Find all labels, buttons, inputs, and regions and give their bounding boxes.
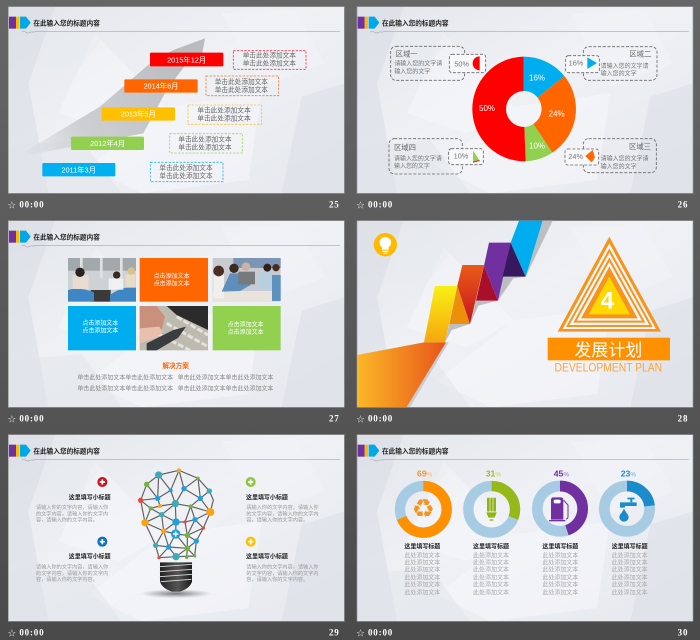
caption column 2: 此处添加文本: [473, 559, 509, 567]
footer: 00:00: [368, 627, 393, 637]
text block: bottom right: 这里填写小标题: [246, 553, 288, 561]
callout: region 4: 区域四: [394, 143, 416, 152]
ring chart: 69% recycle: 69%: [417, 468, 433, 478]
callout: region 2: [566, 47, 657, 80]
caption column 2: 此处添加文本: [473, 573, 509, 581]
caption column 4: 此处添加文本: [612, 551, 648, 559]
slide 25: timeline: [7, 7, 344, 211]
icon: faucet: [619, 498, 637, 522]
tile: blue: 点击添加文本: [82, 326, 118, 334]
footer: [7, 414, 340, 426]
network light bulb: [138, 468, 214, 598]
caption column 4: 此处添加文本: [612, 573, 648, 581]
slide header: 在此输入您的标题内容: [382, 18, 449, 27]
text block: bottom right: 容，请输入你的文字内容。: [246, 575, 308, 583]
donut: [472, 57, 576, 161]
nested triangle badge: [558, 237, 661, 332]
slide header: [9, 17, 340, 33]
caption column 3: 此处添加文本: [542, 573, 578, 581]
slide header: [9, 445, 340, 461]
folded ribbon: [357, 221, 553, 407]
footer: 00:00: [19, 627, 44, 637]
caption column 1: 此处添加文本: [404, 573, 440, 581]
caption column 4: 此处添加文本: [612, 559, 648, 567]
caption column 2: 此处添加文本: [473, 581, 509, 589]
footer: ☆: [7, 200, 16, 211]
section title banner: [548, 338, 670, 375]
timeline 2012: 单击此处添加文本: [178, 134, 232, 143]
slide 30: ring charts: [356, 435, 693, 639]
callout: region 2: 区域二: [629, 50, 651, 59]
timeline 2015: 单击此处添加文本: [243, 51, 296, 60]
solution text: 单击此处添加文本单击此处添加文本: [77, 385, 173, 393]
footer: 25: [329, 199, 340, 209]
callout: region 4: 10%: [454, 151, 469, 160]
caption column 3: 此处添加文本: [542, 559, 578, 567]
timeline 2011: [42, 162, 223, 182]
callout: region 4: [389, 139, 483, 174]
tile: blue: [68, 306, 136, 350]
ring chart: 23% water: [604, 468, 650, 531]
footer: 00:00: [368, 414, 393, 424]
caption column 4: 这里填写标题: [612, 542, 648, 550]
slide header: 在此输入您的标题内容: [382, 446, 449, 455]
caption column 1: 此处添加文本: [404, 581, 440, 589]
footer: [356, 627, 688, 639]
footer: 00:00: [19, 414, 44, 424]
text block: bottom right: 的文字内容，请输入你的文字内: [246, 569, 319, 577]
ring chart: 69% recycle: [400, 468, 447, 533]
caption column 1: 此处添加文本: [404, 551, 440, 559]
tile: orange: 点击添加文本: [154, 272, 190, 280]
ring chart: 45% fuel: 45%: [554, 468, 569, 478]
footer: [7, 627, 340, 639]
solution text: 单击此处添加文本单击此处添加文本: [178, 373, 273, 381]
caption column 4: [612, 542, 648, 596]
footer: ☆: [356, 200, 365, 211]
icon: recycle: ♻: [412, 495, 435, 525]
text block: bottom left: 容，请输入你的文字内容。: [36, 575, 98, 583]
photo: calculator: [140, 306, 208, 350]
timeline 2013: [102, 105, 262, 124]
caption column 2: [473, 542, 509, 596]
callout: region 3: 输入您的文字: [601, 162, 637, 170]
donut: 50%: [479, 104, 495, 113]
text block: bottom left: [36, 537, 111, 583]
timeline 2013: 单击此处添加文本: [197, 105, 251, 114]
timeline 2013: 单击此处添加文本: [197, 114, 251, 123]
caption column 1: 此处添加文本: [404, 559, 440, 567]
donut: 24%: [549, 110, 565, 119]
icon: light bulb badge: [374, 233, 397, 256]
callout: region 3: 24%: [568, 152, 583, 161]
callout: region 2: 请输入您的文字请: [601, 62, 649, 70]
callout: region 1: 输入您的文字: [394, 67, 430, 75]
ring chart: 23% water: 23%: [621, 468, 636, 478]
callout: region 1: [391, 46, 486, 80]
timeline 2011: 单击此处添加文本: [159, 171, 213, 180]
footer: ☆: [7, 628, 16, 639]
callout: region 3: [565, 139, 656, 173]
photo: meeting in lounge: [68, 258, 136, 302]
caption column 3: 此处添加文本: [542, 581, 578, 589]
text block: top left: 容，请输入你的文字内容。: [36, 515, 98, 523]
text block: bottom left: 的文字内容，请输入你的文字内: [36, 569, 108, 577]
callout: region 3: 区域三: [629, 142, 651, 151]
text block: top right: 请输入你的文字内容，请输入你: [246, 503, 319, 511]
slide 26: donut chart: [356, 7, 693, 211]
footer: [356, 199, 688, 211]
tile: green: 点击添加文本: [228, 328, 264, 336]
solution text: [77, 361, 273, 393]
slide header: 在此输入您的标题内容: [33, 232, 100, 241]
tile: orange: 点击添加文本: [154, 280, 190, 288]
text block: top left: 这里填写小标题: [69, 493, 111, 501]
icon: fuel pump: [549, 497, 568, 521]
text block: top right: 这里填写小标题: [246, 493, 288, 501]
footer: 00:00: [19, 199, 44, 209]
caption column 3: 这里填写标题: [542, 542, 578, 550]
tile: green: [213, 306, 281, 350]
timeline 2014: 单击此处添加文本: [215, 85, 268, 94]
caption column 2: 此处添加文本: [473, 551, 509, 559]
callout: region 1: 50%: [454, 59, 469, 68]
timeline 2012: 单击此处添加文本: [178, 142, 232, 151]
photo: business team: [213, 258, 281, 302]
text block: top left: 请输入你的文字内容，请输入你: [36, 503, 108, 511]
callout: region 1: 请输入您的文字请: [394, 60, 442, 68]
ring chart: 45% fuel: [537, 468, 583, 531]
slide header: 在此输入您的标题内容: [33, 18, 100, 27]
footer: ☆: [356, 628, 365, 639]
timeline 2011: 2011年3月: [61, 165, 96, 174]
solution text: 解决方案: [162, 361, 189, 370]
section title banner: DEVELOPMENT PLAN: [554, 361, 662, 375]
slide 27: photo grid: [7, 221, 344, 426]
footer: ☆: [356, 415, 365, 426]
tile: blue: 点击添加文本: [82, 319, 118, 327]
caption column 1: 此处添加文本: [404, 566, 440, 574]
solution text: 单击此处添加文本单击此处添加文本: [178, 385, 273, 393]
caption column 2: 此处添加文本: [473, 566, 509, 574]
slide header: [358, 445, 689, 461]
caption column 3: [542, 542, 578, 596]
caption column 3: 此处添加文本: [542, 566, 578, 574]
caption column 4: 此处添加文本: [612, 581, 648, 589]
footer: 28: [678, 414, 688, 424]
text block: top left: 的文字内容，请输入你的文字内: [36, 509, 108, 517]
callout: region 4: 请输入您的文字请: [394, 154, 442, 162]
timeline 2015: [150, 51, 306, 69]
slide 29: network bulb: [7, 435, 344, 639]
caption column 1: 这里填写标题: [404, 542, 440, 550]
callout: region 4: 输入您的文字: [394, 162, 430, 170]
text block: bottom left: 请输入你的文字内容，请输入你: [36, 563, 108, 571]
callout: region 2: 16%: [569, 59, 584, 68]
caption column 1: [404, 542, 440, 596]
callout: region 2: 输入您的文字: [601, 70, 637, 78]
text block: top right: [246, 477, 319, 523]
slide header: [358, 17, 689, 33]
arrow: rising grey: [19, 38, 205, 157]
timeline 2012: 2012年4月: [90, 139, 125, 148]
callout: region 3: 请输入您的文字请: [601, 155, 649, 163]
timeline 2013: 2013年5月: [121, 110, 156, 119]
caption column 3: 此处添加文本: [542, 588, 578, 596]
slide header: [9, 231, 340, 247]
footer: ☆: [7, 415, 16, 426]
timeline 2012: [71, 134, 242, 153]
timeline 2015: 单击此处添加文本: [243, 59, 296, 68]
footer: 27: [329, 414, 340, 424]
caption column 2: 这里填写标题: [473, 542, 509, 550]
donut: 10%: [529, 142, 545, 151]
footer: [356, 414, 688, 426]
footer: 29: [329, 627, 340, 637]
caption column 4: 此处添加文本: [612, 588, 648, 596]
text block: top right: 容，请输入你的文字内容。: [246, 515, 308, 523]
text block: bottom left: 这里填写小标题: [69, 553, 111, 561]
timeline 2015: 2015年12月: [167, 55, 206, 64]
ring chart: 31% lamp: 31%: [486, 468, 501, 478]
donut: 16%: [529, 73, 545, 82]
callout: region 1: 区域一: [396, 50, 418, 59]
footer: 00:00: [368, 199, 393, 209]
caption column 3: 此处添加文本: [542, 551, 578, 559]
text block: top left: [36, 477, 111, 523]
nested triangle badge: 4: [601, 287, 615, 314]
slide 28: section divider: [356, 221, 693, 426]
footer: 30: [678, 627, 688, 637]
timeline 2014: 单击此处添加文本: [215, 77, 268, 86]
footer: 26: [678, 199, 688, 209]
text block: top right: 的文字内容，请输入你的文字内: [246, 509, 319, 517]
slide header: 在此输入您的标题内容: [33, 446, 100, 455]
timeline 2014: 2014年6月: [143, 82, 179, 91]
text block: bottom right: [246, 537, 319, 583]
caption column 1: 此处添加文本: [404, 588, 440, 596]
icon: energy lamp: [486, 498, 497, 521]
caption column 4: 此处添加文本: [612, 566, 648, 574]
timeline 2011: 单击此处添加文本: [159, 163, 213, 172]
text block: bottom right: 请输入你的文字内容，请输入你: [246, 563, 319, 571]
solution text: 单击此处添加文本单击此处添加文本: [77, 373, 173, 381]
timeline 2014: [124, 76, 279, 96]
tile: orange: [140, 258, 208, 302]
footer: [7, 199, 340, 211]
tile: green: 点击添加文本: [228, 320, 264, 328]
ring chart: 31% lamp: [468, 468, 515, 533]
section title banner: 发展计划: [574, 341, 642, 360]
caption column 2: 此处添加文本: [473, 588, 509, 596]
